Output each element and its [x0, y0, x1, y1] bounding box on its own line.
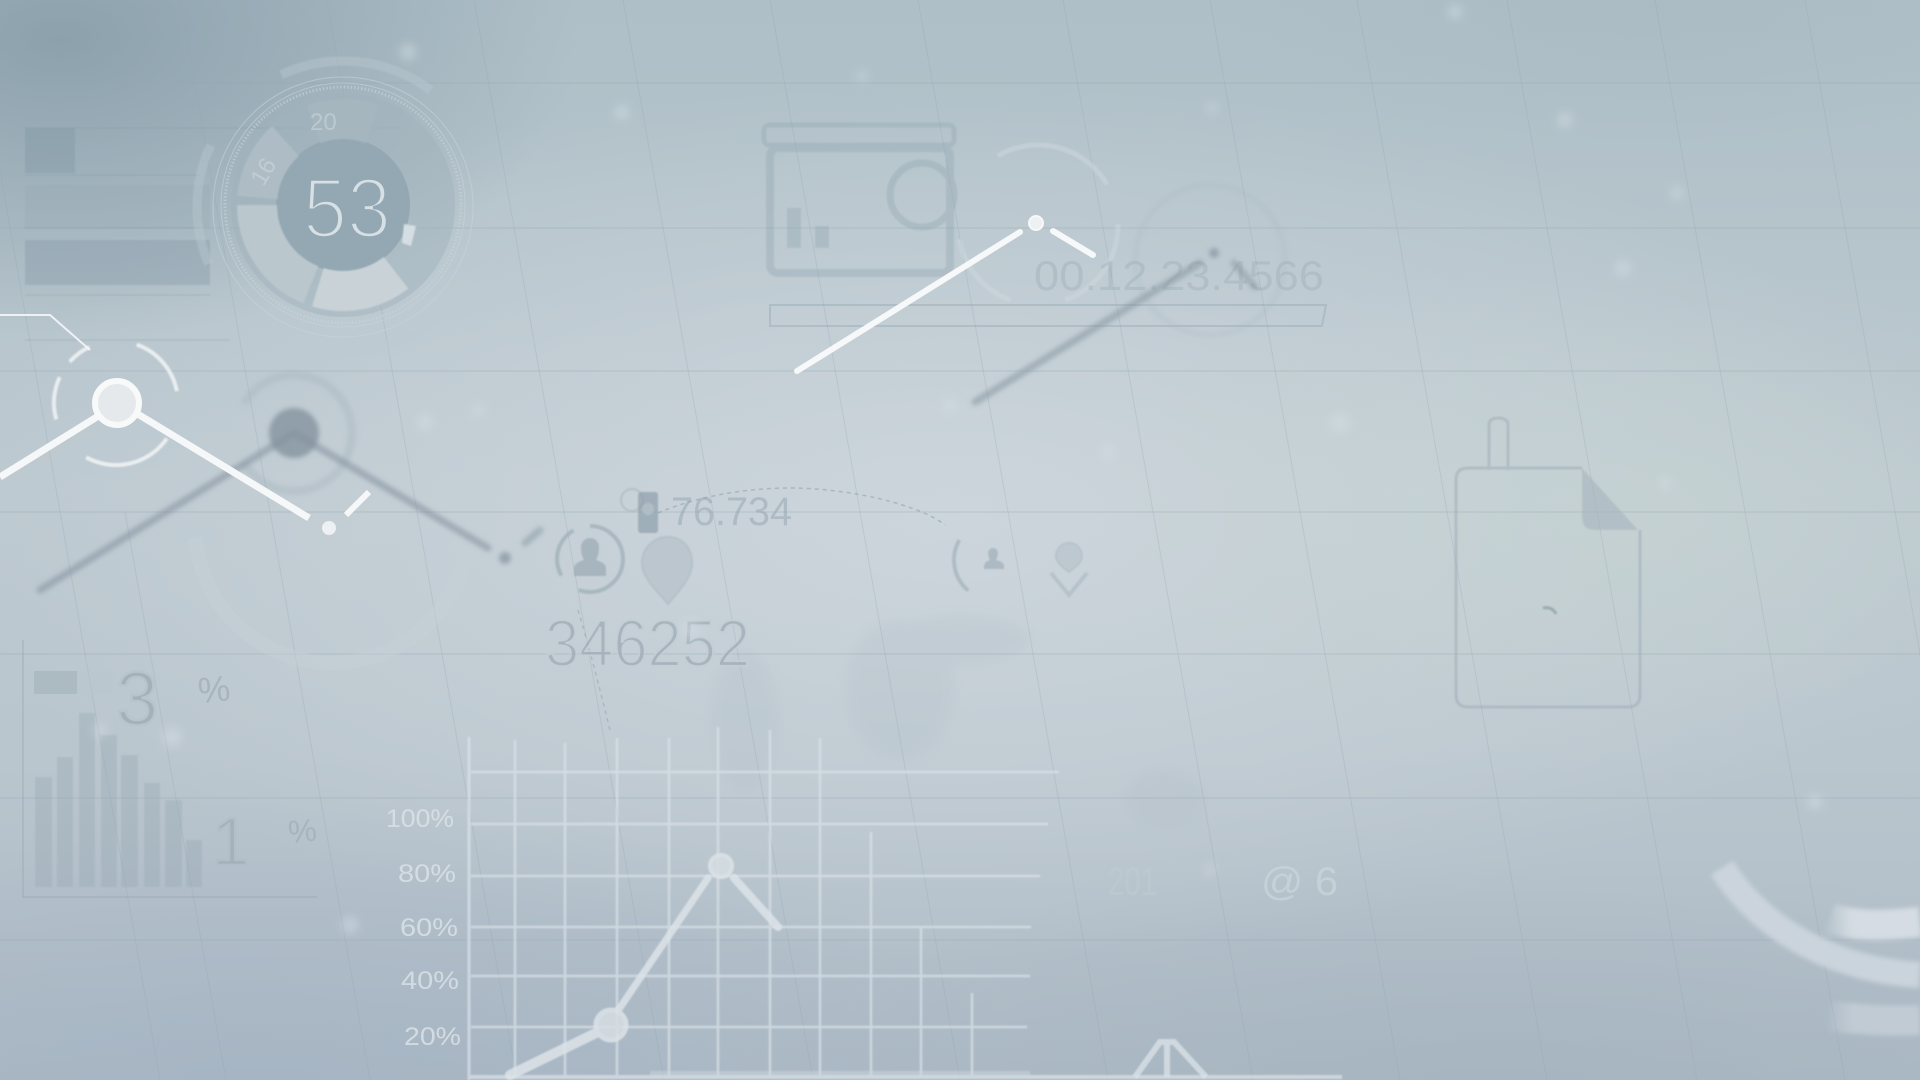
- percent sign top: %: [196, 667, 232, 711]
- gauge value: 53: [303, 161, 391, 255]
- label 201: 201: [1108, 860, 1157, 904]
- faint big ring: [173, 367, 491, 685]
- faint ring top: [958, 145, 1118, 305]
- chart y labels: [386, 805, 461, 1051]
- panel: left bars: [25, 128, 400, 340]
- chart y labels: 100%: [386, 805, 454, 833]
- bar chart: [35, 713, 202, 887]
- icon: user ring: [557, 526, 623, 592]
- chart data line: [510, 855, 778, 1075]
- timer progress bar: [770, 305, 1326, 326]
- dark blurred line top: [975, 248, 1255, 402]
- counter 346252: 346252: [545, 606, 750, 680]
- end dot: [322, 521, 336, 535]
- white line chart top: [797, 216, 1093, 371]
- gauge tick 20: 20: [310, 109, 337, 136]
- icon: document: [1456, 418, 1640, 707]
- phone icon: [621, 489, 658, 533]
- icon: pin: [642, 537, 692, 604]
- dashed connection arc: [658, 488, 945, 525]
- faint dark ring top right: [1135, 185, 1285, 335]
- callout leader: [0, 315, 90, 350]
- chart y labels: 60%: [400, 914, 458, 942]
- gauge outer arcs: [137, 1, 549, 413]
- dashed connection down: [578, 610, 610, 730]
- bar chart axis: [23, 640, 317, 897]
- value 1: 1: [212, 804, 250, 880]
- gauge tick 16: 16: [245, 153, 282, 190]
- dark blurred line chart: [40, 375, 540, 590]
- small peak marker: [1135, 1042, 1206, 1077]
- percent sign bottom: %: [286, 812, 318, 850]
- chart y labels: 20%: [404, 1023, 461, 1051]
- counter 76.734: 76.734: [671, 490, 792, 534]
- gauge rings: [213, 77, 473, 337]
- white line chart left: [0, 315, 369, 535]
- gauge donut segments: [222, 84, 464, 326]
- label at 6: @ 6: [1261, 860, 1338, 904]
- main node: [95, 381, 139, 425]
- chart node 1: [596, 1010, 626, 1040]
- end dash: [346, 492, 369, 515]
- floating particles: [94, 5, 1822, 933]
- node dashed ring: [37, 324, 195, 482]
- gauge chip: [402, 224, 416, 246]
- icon: stacked bar strip: [34, 671, 113, 694]
- chart y labels: 40%: [401, 967, 459, 995]
- timer readout: 00.12.23.4566: [1034, 252, 1324, 299]
- document fold: [1582, 468, 1638, 530]
- chart y labels: 80%: [398, 860, 456, 888]
- gauge backing: [231, 93, 455, 317]
- value 3: 3: [116, 657, 158, 742]
- icon: pin right: [1051, 543, 1087, 595]
- gauge inner disc: [276, 138, 410, 272]
- chart node 2: [710, 855, 732, 877]
- paperclip: [1489, 418, 1508, 470]
- white line segments: [0, 413, 309, 518]
- line chart grid: [469, 727, 1342, 1080]
- device icon: [764, 125, 954, 273]
- icon: user ring right: [938, 504, 1050, 616]
- faint world map: [710, 615, 1205, 830]
- gauge: 53: [137, 1, 549, 413]
- right arcs: [1722, 868, 1920, 1020]
